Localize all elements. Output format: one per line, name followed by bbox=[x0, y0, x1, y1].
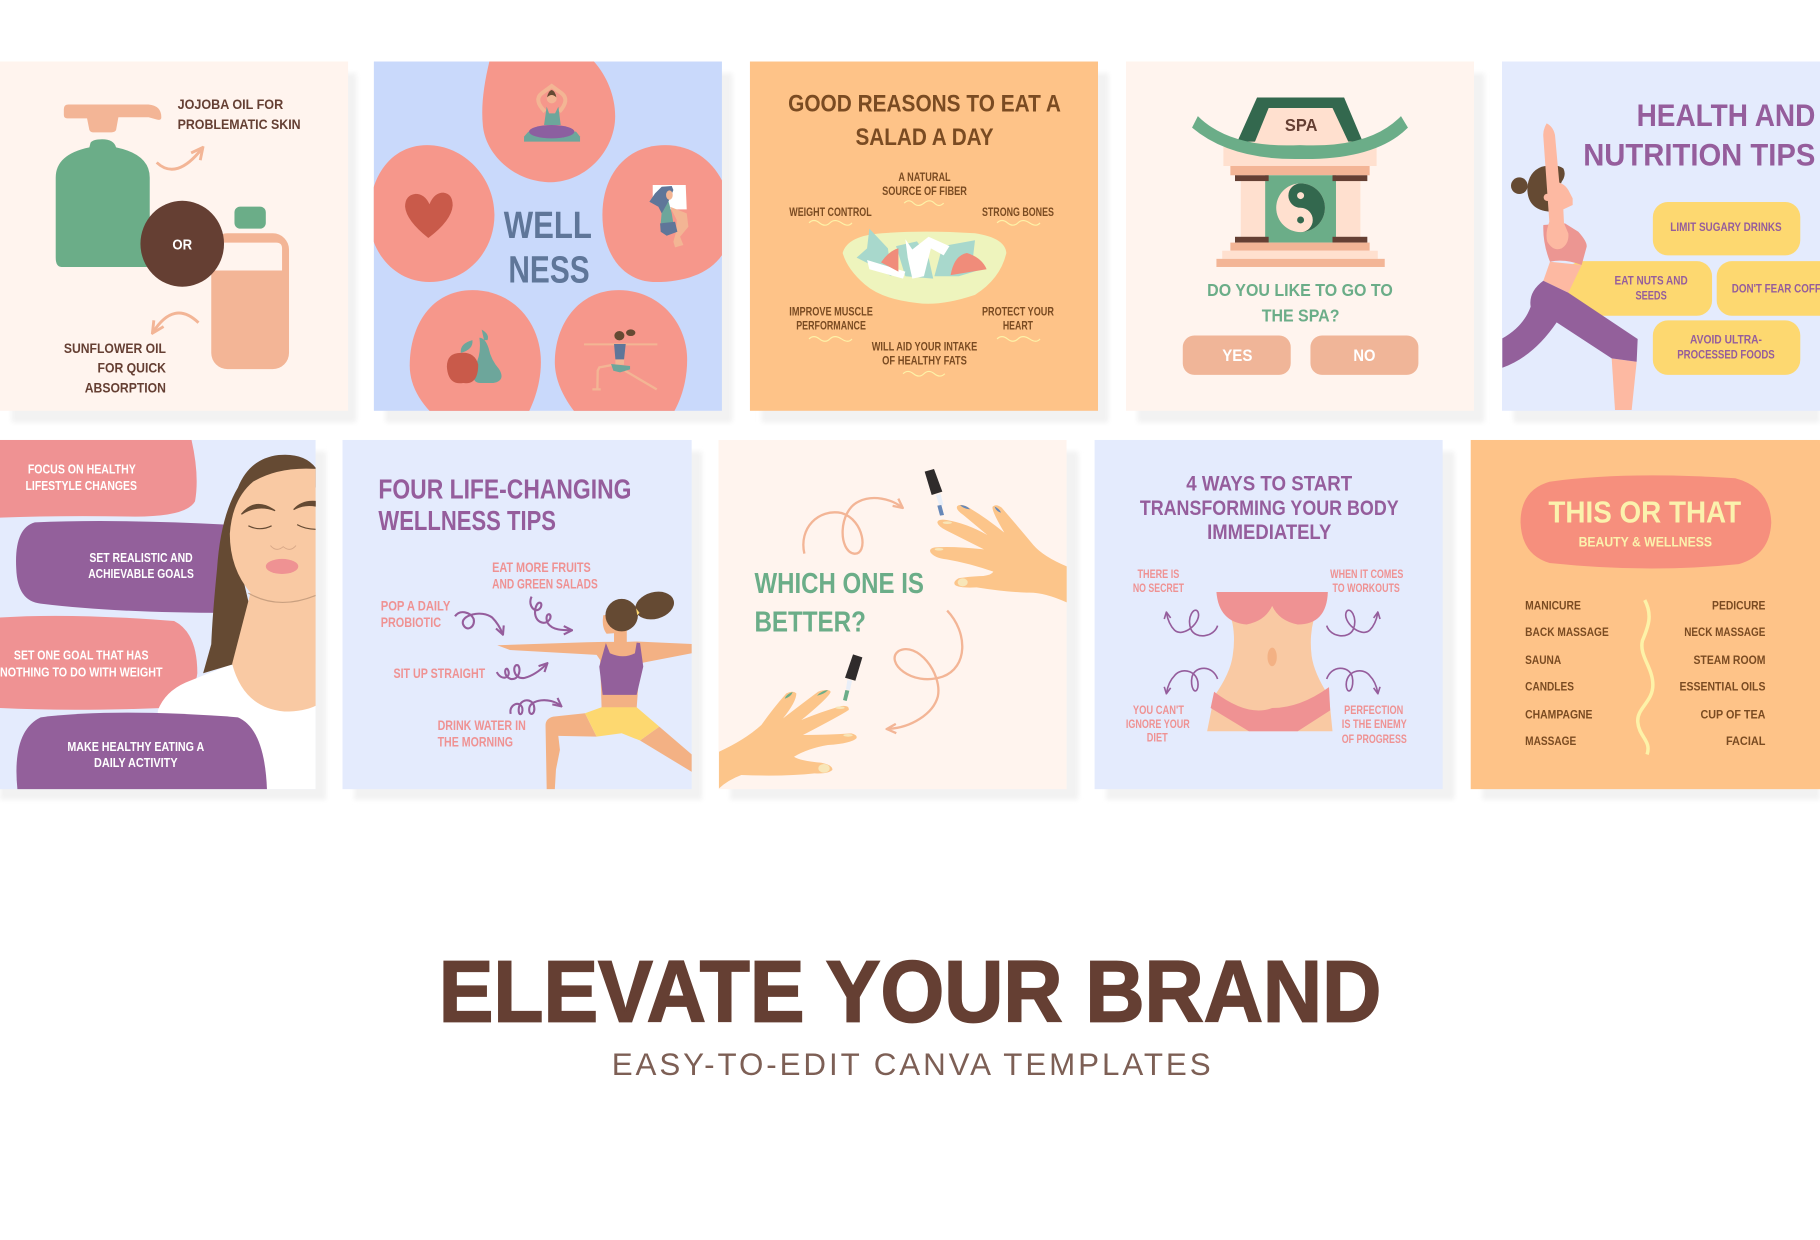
icon: meditation bbox=[524, 86, 580, 142]
reasons list: WILL AID YOUR INTAKE bbox=[872, 341, 978, 354]
heading bbox=[378, 479, 630, 530]
icon: warrior pose bbox=[584, 329, 657, 389]
heading: WHICH ONE IS bbox=[754, 568, 924, 600]
icon: hand and polish bottom bbox=[719, 654, 862, 788]
tips text: PROBIOTIC bbox=[381, 614, 441, 630]
tips text: OF PROGRESS bbox=[1342, 733, 1407, 746]
heading bbox=[1140, 472, 1399, 544]
heading: WELLNESS TIPS bbox=[378, 505, 556, 536]
subtitle: EASY-TO-EDIT CANVA TEMPLATES bbox=[612, 1047, 1211, 1082]
arrow: up to jojoba text bbox=[157, 149, 202, 169]
icon: spa temple: SPA bbox=[1285, 115, 1318, 135]
reasons list bbox=[789, 171, 1054, 367]
panel: which one is better bbox=[718, 440, 1067, 789]
tip text: PROCESSED FOODS bbox=[1677, 349, 1775, 362]
heading: BETTER? bbox=[754, 606, 866, 638]
list: right options bbox=[1680, 599, 1766, 748]
panel: this or that bbox=[1471, 440, 1820, 789]
curly arrows bbox=[1167, 610, 1378, 693]
icon: sleeping woman bbox=[649, 185, 688, 247]
reasons list: SOURCE OF FIBER bbox=[882, 185, 967, 198]
tips text: YOU CAN'T bbox=[1133, 704, 1184, 717]
curly arrows bbox=[455, 597, 571, 714]
reasons list: A NATURAL bbox=[898, 171, 951, 184]
bubble: set realistic: ACHIEVABLE GOALS bbox=[88, 566, 194, 581]
curly arrows bbox=[803, 498, 962, 729]
list: right options: STEAM ROOM bbox=[1693, 654, 1765, 667]
bubble: set one goal: NOTHING TO DO WITH WEIGHT bbox=[0, 665, 163, 680]
bubble: make healthy eating: DAILY ACTIVITY bbox=[94, 755, 178, 770]
icon: spa temple bbox=[1192, 98, 1408, 267]
icon: hand and polish top bbox=[925, 469, 1067, 603]
panel: transform your body bbox=[1095, 440, 1443, 789]
question text bbox=[1208, 284, 1392, 322]
bubble: make healthy eating: MAKE HEALTHY EATING A bbox=[67, 739, 204, 754]
main title: ELEVATE YOUR BRAND bbox=[439, 943, 1381, 1040]
tips text: DRINK WATER IN bbox=[438, 717, 526, 733]
tip text bbox=[1615, 221, 1820, 362]
tips text: NO SECRET bbox=[1133, 582, 1184, 595]
tips text bbox=[381, 559, 598, 749]
panel: spa question bbox=[1126, 62, 1474, 411]
icon: salad bowl bbox=[843, 229, 1006, 304]
tips text: THERE IS bbox=[1138, 568, 1179, 581]
blob circles bbox=[369, 46, 731, 413]
heading bbox=[789, 94, 1060, 145]
tips text: AND GREEN SALADS bbox=[492, 575, 598, 591]
icon: pump bottle bbox=[56, 104, 161, 267]
figure: yoga woman bbox=[1502, 123, 1638, 410]
panel: four life-changing tips bbox=[342, 440, 692, 789]
panel: health and nutrition tips bbox=[1502, 62, 1820, 411]
panel: wellness bbox=[369, 46, 731, 413]
tip text: EAT NUTS AND bbox=[1615, 274, 1688, 287]
button: yes: YES bbox=[1222, 347, 1253, 365]
reasons list: STRONG BONES bbox=[982, 206, 1054, 219]
title: well ness: NESS bbox=[508, 249, 590, 292]
tips text: SIT UP STRAIGHT bbox=[393, 665, 486, 681]
list: left options: MASSAGE bbox=[1525, 735, 1576, 748]
heading bbox=[1585, 104, 1814, 166]
text: sunflower oil: FOR QUICK bbox=[98, 360, 166, 376]
icon: peach bottle bbox=[211, 207, 289, 369]
tips text: IS THE ENEMY bbox=[1342, 718, 1407, 731]
title badge bbox=[1521, 475, 1771, 568]
text: jojoba oil: PROBLEMATIC SKIN bbox=[178, 116, 301, 132]
bubble: make healthy eating bbox=[16, 713, 267, 789]
OR badge bbox=[140, 201, 224, 287]
list: right options: ESSENTIAL OILS bbox=[1680, 681, 1766, 694]
heading: SALAD A DAY bbox=[855, 124, 994, 151]
text: jojoba oil: JOJOBA OIL FOR bbox=[178, 96, 283, 112]
list: left options: CHAMPAGNE bbox=[1525, 708, 1593, 721]
tips text: TO WORKOUTS bbox=[1332, 582, 1400, 595]
title: well ness: WELL bbox=[504, 204, 592, 247]
tips text: POP A DAILY bbox=[381, 598, 451, 614]
list: right options: CUP OF TEA bbox=[1700, 708, 1766, 721]
tips text: PERFECTION bbox=[1344, 704, 1403, 717]
question text: DO YOU LIKE TO GO TO bbox=[1207, 280, 1393, 300]
reasons list: WEIGHT CONTROL bbox=[789, 206, 872, 219]
list: left options: CANDLES bbox=[1525, 681, 1574, 694]
title badge: THIS OR THAT bbox=[1548, 496, 1742, 529]
tips text bbox=[1126, 568, 1407, 746]
bubble: set one goal bbox=[0, 616, 197, 710]
question text: THE SPA? bbox=[1262, 306, 1339, 326]
icon: fruit bbox=[447, 330, 502, 383]
heading: IMMEDIATELY bbox=[1207, 521, 1331, 544]
tips text: WHEN IT COMES bbox=[1330, 568, 1404, 581]
text: sunflower oil: ABSORPTION bbox=[85, 379, 166, 395]
tips text: IGNORE YOUR bbox=[1126, 718, 1190, 731]
OR badge: OR bbox=[172, 237, 192, 254]
button: no: NO bbox=[1353, 347, 1375, 365]
heading: FOUR LIFE-CHANGING bbox=[378, 474, 631, 505]
wavy divider bbox=[1638, 600, 1653, 754]
arrow: down to sunflower text bbox=[153, 313, 198, 332]
tips text: DIET bbox=[1147, 732, 1168, 745]
list: left options: SAUNA bbox=[1525, 654, 1562, 667]
figure: warrior pose woman bbox=[497, 588, 692, 789]
list: right options: PEDICURE bbox=[1712, 599, 1766, 612]
list: left options bbox=[1525, 599, 1609, 748]
reasons list: HEART bbox=[1003, 320, 1033, 333]
reasons list: PROTECT YOUR bbox=[982, 306, 1054, 319]
list: right options: FACIAL bbox=[1726, 735, 1765, 748]
panel: salad reasons bbox=[750, 62, 1098, 411]
bubble: set realistic bbox=[16, 521, 226, 613]
text: sunflower oil bbox=[64, 344, 166, 392]
button: no bbox=[1310, 335, 1418, 375]
reasons list: IMPROVE MUSCLE bbox=[789, 306, 873, 319]
tip text: AVOID ULTRA- bbox=[1690, 334, 1762, 347]
panel: jojoba or sunflower oil bbox=[0, 62, 348, 411]
bubble: focus on healthy: FOCUS ON HEALTHY bbox=[28, 462, 136, 477]
bubble: focus on healthy: LIFESTYLE CHANGES bbox=[26, 478, 137, 493]
figure: torso bbox=[1207, 592, 1332, 731]
bubble: focus on healthy bbox=[0, 440, 197, 518]
list: left options: BACK MASSAGE bbox=[1525, 626, 1609, 639]
reasons list: PERFORMANCE bbox=[796, 320, 866, 333]
reasons list: OF HEALTHY FATS bbox=[882, 354, 967, 367]
tip text: LIMIT SUGARY DRINKS bbox=[1670, 221, 1782, 234]
figure: woman with closed eyes bbox=[158, 455, 316, 789]
panel: healthy lifestyle goals bbox=[0, 440, 316, 789]
heading: GOOD REASONS TO EAT A bbox=[788, 90, 1061, 117]
tips text: EAT MORE FRUITS bbox=[492, 559, 591, 575]
tips text: THE MORNING bbox=[438, 733, 513, 749]
bubble: set realistic: SET REALISTIC AND bbox=[89, 550, 193, 565]
title: well ness bbox=[504, 212, 591, 283]
icon: heart bbox=[405, 193, 453, 238]
list: right options: NECK MASSAGE bbox=[1684, 626, 1766, 639]
heading bbox=[754, 568, 924, 638]
bubble: set one goal: SET ONE GOAL THAT HAS bbox=[14, 647, 149, 662]
list: left options: MANICURE bbox=[1525, 599, 1581, 612]
title badge: BEAUTY & WELLNESS bbox=[1579, 534, 1712, 550]
text: jojoba oil bbox=[178, 100, 300, 129]
heading: TRANSFORMING YOUR BODY bbox=[1140, 497, 1399, 520]
tip bubbles bbox=[1567, 202, 1820, 375]
button: yes bbox=[1183, 335, 1291, 375]
tip text: SEEDS bbox=[1635, 289, 1667, 302]
text: sunflower oil: SUNFLOWER OIL bbox=[64, 340, 166, 356]
heading: 4 WAYS TO START bbox=[1186, 472, 1352, 495]
